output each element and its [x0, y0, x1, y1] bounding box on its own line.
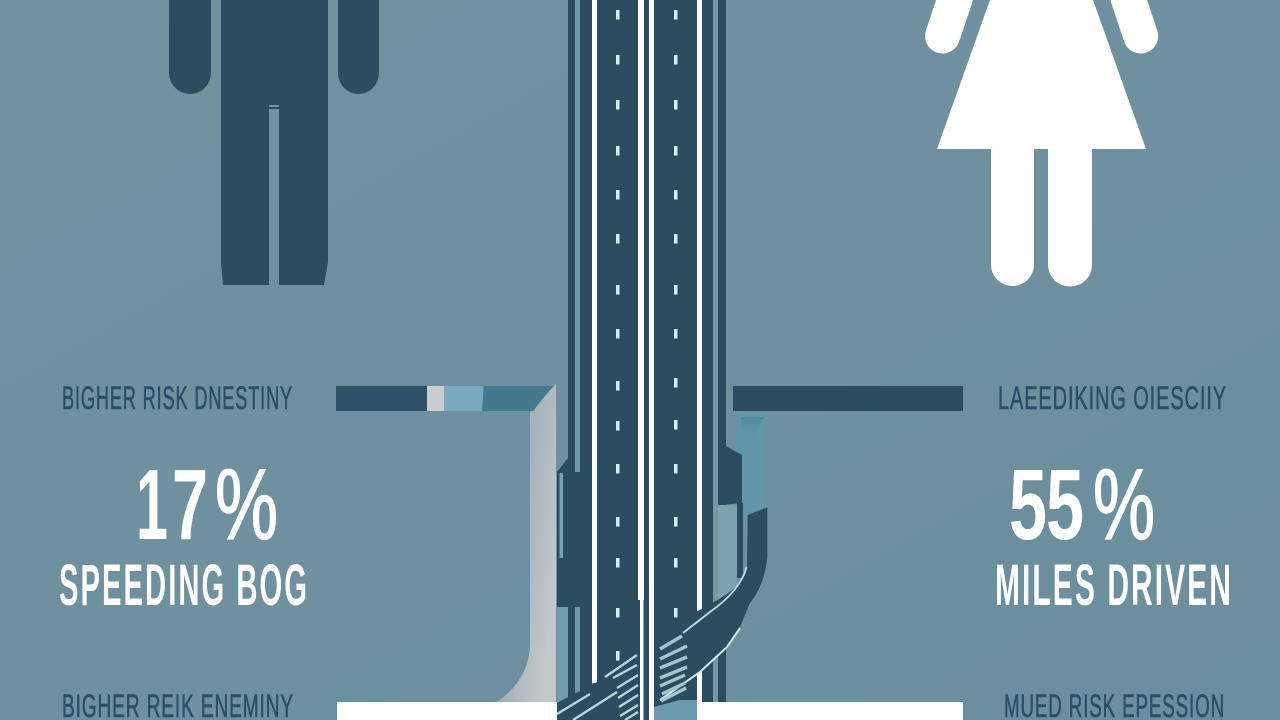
right stat: 55%: 5 [1046, 449, 1084, 561]
right stat: 55%: % [1093, 449, 1155, 561]
road: right curved ramp [660, 507, 767, 700]
left stat: 17% [136, 449, 278, 561]
central highway [557, 0, 769, 720]
left stat: 17%: 7 [172, 449, 208, 561]
left heading: BIGHER RISK DNESTINY [62, 380, 293, 416]
right stat: 55% [1009, 449, 1155, 561]
bottom right white bar [697, 702, 963, 720]
road: left widening shoulder [557, 458, 592, 702]
road: left ramp with hatching [557, 655, 638, 720]
right bar [733, 386, 963, 411]
left grey connector panel [497, 384, 556, 702]
icon: male figure [169, 0, 379, 285]
road: base stripes [568, 0, 726, 720]
road: right widening shoulder [718, 370, 743, 600]
left segmented bar [336, 386, 553, 411]
road: right hatching [660, 636, 687, 701]
right stat: 55%: 5 [1009, 449, 1047, 561]
bottom left white bar [337, 702, 557, 720]
icon: female figure [937, 0, 1146, 286]
left stat: 17%: 1 [136, 449, 168, 561]
left stat: 17%: % [215, 449, 278, 561]
road: lane dashes [616, 10, 678, 660]
left stat label: SPEEDING BOG [59, 553, 309, 618]
road: right teal block [737, 413, 769, 520]
